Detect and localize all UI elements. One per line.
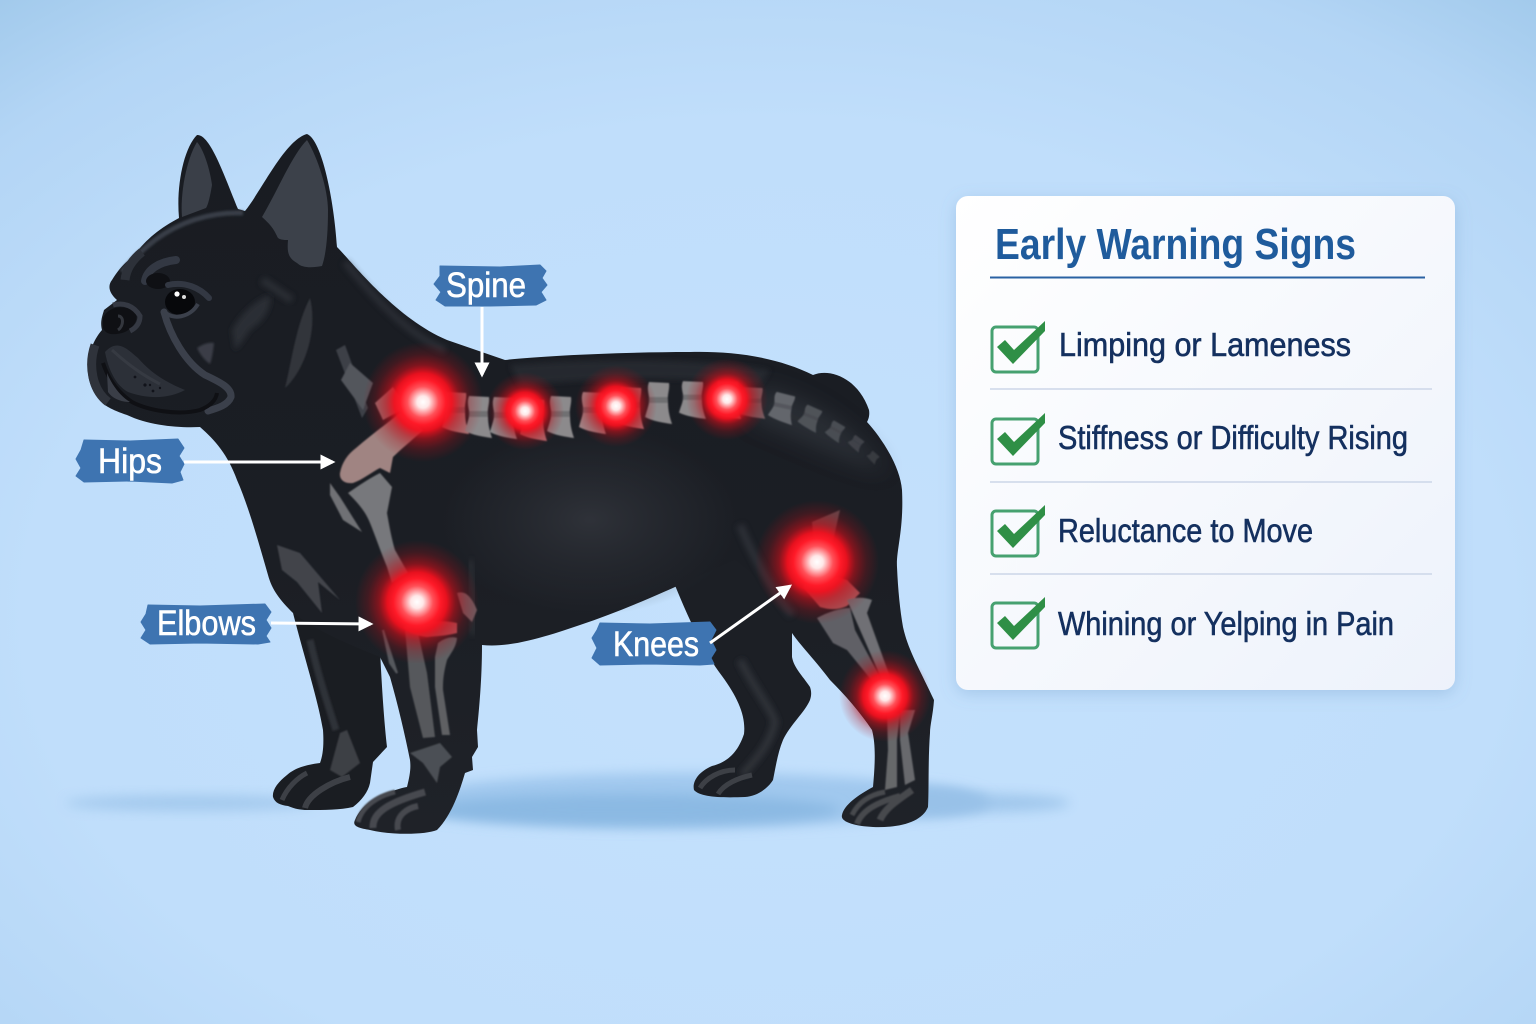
brow xyxy=(145,260,176,281)
head top highlight xyxy=(122,213,243,272)
pain glow: spine xyxy=(363,342,483,462)
dog illustration xyxy=(88,134,934,834)
label: Elbows: Elbows xyxy=(157,604,256,643)
eye xyxy=(165,289,198,317)
ear inner left xyxy=(182,142,212,217)
skeleton: shoulder and front leg xyxy=(330,387,477,830)
pain glow: elbow xyxy=(355,540,479,664)
cheek patches xyxy=(232,295,270,350)
sign: limping xyxy=(992,321,1351,372)
arrow: Hips xyxy=(184,460,333,464)
ear inner right xyxy=(262,140,328,267)
sign: reluctance: Reluctance to Move xyxy=(1058,512,1313,549)
sign: whining xyxy=(992,597,1394,648)
label: Hips: Hips xyxy=(98,442,162,481)
pain glow: spine 2 xyxy=(486,372,564,450)
label: Hips xyxy=(76,439,184,483)
skeleton: neck vertebrae xyxy=(336,345,373,418)
body fur shading xyxy=(277,262,885,635)
pain glow: spine 3 xyxy=(575,365,657,447)
label: Knees: Knees xyxy=(613,625,699,664)
sign: limping: Limping or Lameness xyxy=(1059,326,1351,363)
sign: stiffness: Stiffness or Difficulty Rising xyxy=(1058,419,1408,456)
label: Spine: Spine xyxy=(446,266,526,305)
panel: early warning signs xyxy=(956,196,1455,690)
far front leg xyxy=(273,613,387,810)
body and head silhouette xyxy=(88,134,934,834)
skeleton: hind leg xyxy=(803,510,915,824)
sign: stiffness xyxy=(992,413,1408,464)
pain glow: spine 4 xyxy=(686,358,768,440)
pain glow: hock xyxy=(839,650,931,742)
arrow: Spine xyxy=(480,307,484,375)
skeleton: spine vertebrae xyxy=(442,381,881,465)
arrow: Elbows xyxy=(271,623,371,624)
sign: whining: Whining or Yelping in Pain xyxy=(1058,605,1394,642)
head details xyxy=(92,140,328,412)
sign: reluctance xyxy=(992,505,1313,556)
far back leg xyxy=(672,550,811,797)
ground shadow xyxy=(65,773,1070,827)
heading: Early Warning Signs xyxy=(995,220,1356,269)
pain glow: knee xyxy=(755,500,879,624)
muzzle folds xyxy=(105,346,185,397)
nose xyxy=(103,304,140,334)
arrow: Knees xyxy=(710,586,790,643)
